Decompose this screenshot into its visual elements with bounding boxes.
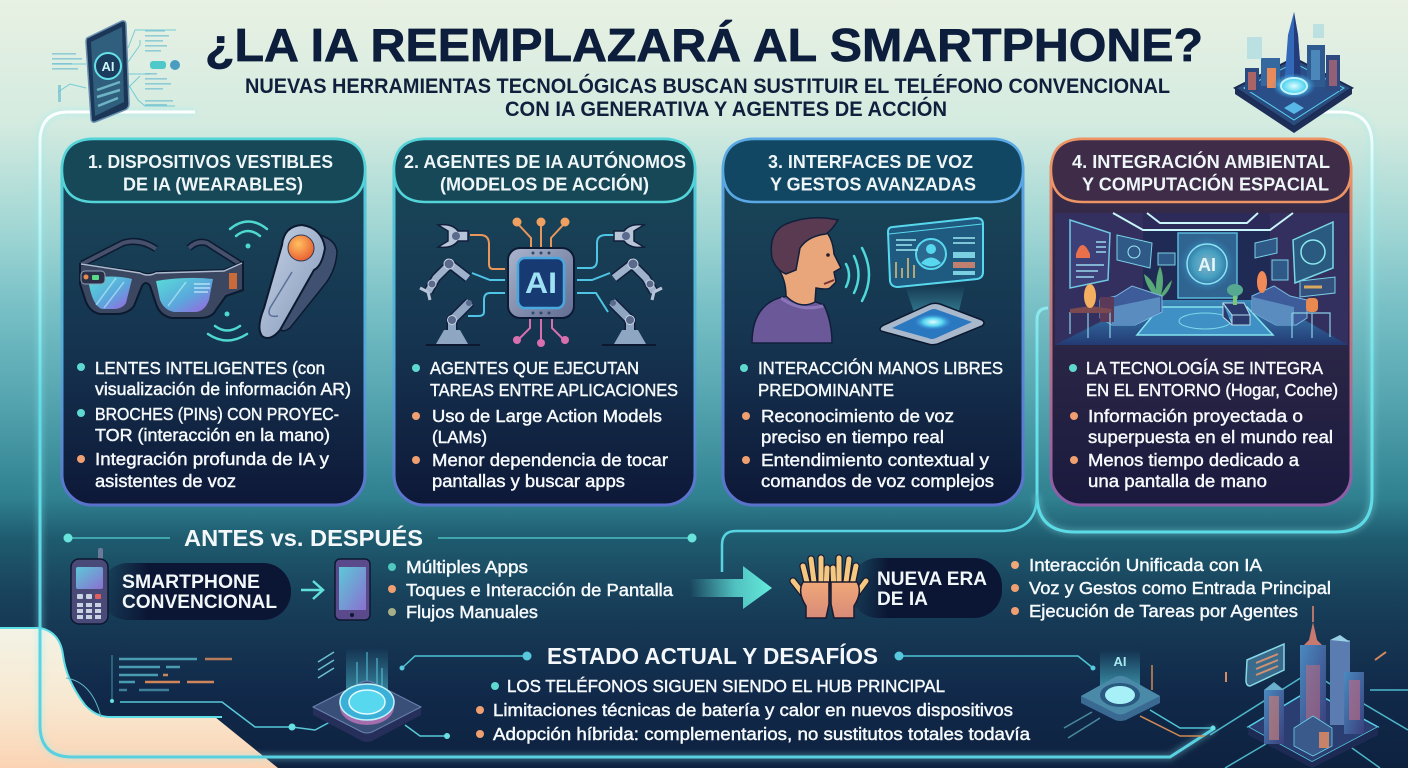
bullet list: wearables: asistentes de voz xyxy=(95,471,236,491)
bullet list: current state: Limitaciones técnicas de batería y calor en nuevos dispositivos xyxy=(493,700,1013,720)
bullet list: wearables: LENTES INTELIGENTES (con xyxy=(95,358,325,378)
bullet list: ambient integration: EN EL ENTORNO (Hogar, Coche) xyxy=(1086,380,1338,400)
bullet list: ambient integration: Información proyectada o xyxy=(1088,406,1303,426)
heading: voice and gestures: Y GESTOS AVANZADAS xyxy=(770,174,976,194)
heading: current state xyxy=(400,642,1096,670)
arrow: small xyxy=(301,581,323,599)
bullet list: before: Toques e Interacción de Pantalla xyxy=(406,580,673,600)
bullet list: agents xyxy=(412,358,678,491)
heading: voice and gestures: 3. INTERFACES DE VOZ xyxy=(768,151,973,172)
heading: wearables: 1. DISPOSITIVOS VESTIBLES xyxy=(88,151,333,172)
bullet list: wearables xyxy=(77,358,351,491)
icon: AI phone with data callouts xyxy=(52,21,180,122)
bullet list: wearables: visualización de información AR) xyxy=(95,379,351,399)
diagram: AI chip and robot arms xyxy=(420,218,662,347)
icon: feature phone xyxy=(71,548,108,624)
bullet list: ambient integration: una pantalla de mano xyxy=(1088,471,1267,491)
icon: AI phone with data callouts: AI xyxy=(102,59,114,74)
pill: conventional smartphone: CONVENCIONAL xyxy=(122,592,277,613)
illustration: smart living room xyxy=(1055,213,1348,345)
heading: current state: ESTADO ACTUAL Y DESAFÍOS xyxy=(547,642,878,669)
pill: new AI era: NUEVA ERA xyxy=(877,569,987,590)
title: ¿LA IA REEMPLAZARÁ AL SMARTPHONE? xyxy=(205,19,1203,71)
heading: agents: (MODELOS DE ACCIÓN) xyxy=(440,174,649,194)
glowing outer frame xyxy=(40,112,1372,757)
bullet list: voice and gestures: preciso en tiempo real xyxy=(761,427,944,447)
icon: signal waves xyxy=(208,222,267,340)
heading: wearables: DE IA (WEARABLES) xyxy=(123,174,303,194)
robot arms right xyxy=(602,225,662,345)
icon: AI chip small: AI xyxy=(1114,654,1126,669)
heading: voice and gestures xyxy=(723,139,1023,202)
bullet list: voice and gestures xyxy=(740,357,1003,491)
bullet list: voice and gestures: Entendimiento contextual y xyxy=(761,450,989,470)
bullet list: agents: (LAMs) xyxy=(432,427,487,447)
panel: ambient integration xyxy=(1051,139,1351,505)
bullet list: after xyxy=(1011,555,1331,621)
bullet list: voice and gestures: PREDOMINANTE xyxy=(758,380,894,400)
icon: AI chip small xyxy=(1064,650,1216,738)
bullet list: before: Múltiples Apps xyxy=(406,557,528,577)
bullet list: voice and gestures: Reconocimiento de voz xyxy=(761,406,954,426)
bullet list: ambient integration: Menos tiempo dedicado a xyxy=(1088,450,1299,470)
bullet list: after: Interacción Unificada con IA xyxy=(1029,555,1262,575)
bullet list: wearables: Integración profunda de IA y xyxy=(95,449,329,469)
bullet list: current state: LOS TELÉFONOS SIGUEN SIENDO EL HUB PRINCIPAL xyxy=(507,676,945,696)
icon: open hands xyxy=(793,558,866,618)
bullet list: voice and gestures: comandos de voz complejos xyxy=(761,471,994,491)
bullet list: ambient integration: LA TECNOLOGÍA SE INTEGRA xyxy=(1086,358,1323,378)
panel: voice and gestures xyxy=(723,139,1023,505)
heading: before vs after: ANTES vs. DESPUÉS xyxy=(184,524,423,551)
pill: new AI era: DE IA xyxy=(877,589,928,610)
illustration: smart living room: AI xyxy=(1198,255,1216,275)
heading: ambient integration: Y COMPUTACIÓN ESPACIAL xyxy=(1082,174,1329,194)
bullet list: agents: pantallas y buscar apps xyxy=(432,471,625,491)
bullet list: agents: TAREAS ENTRE APLICACIONES xyxy=(430,380,678,400)
heading: ambient integration xyxy=(1051,139,1351,202)
robot arms left xyxy=(420,225,480,345)
bullet list: ambient integration xyxy=(1069,358,1338,491)
section: before vs after xyxy=(64,524,1331,624)
diagram: AI chip and robot arms: AI xyxy=(525,267,557,300)
icon: isometric future city xyxy=(1235,12,1352,133)
pill: new AI era xyxy=(850,558,1002,618)
bullet list: before: Flujos Manuales xyxy=(406,602,538,622)
bullet list: voice and gestures: INTERACCIÓN MANOS LIBRES xyxy=(758,357,1003,378)
decoration: code lines and circuit xyxy=(110,655,330,730)
bullet list: current state xyxy=(476,676,1030,744)
section: current state and challenges xyxy=(400,642,1096,744)
pill: conventional smartphone xyxy=(100,563,291,620)
heading: agents: 2. AGENTES DE IA AUTÓNOMOS xyxy=(404,151,686,172)
bullet list: wearables: TOR (interacción en la mano) xyxy=(95,425,330,445)
bullet list: after: Ejecución de Tareas por Agentes xyxy=(1029,601,1298,621)
subtitle xyxy=(245,73,1170,121)
panel: agents xyxy=(394,139,695,505)
decorative peach corner xyxy=(0,628,278,768)
bullet list: current state: Adopción híbrida: complementarios, no sustitutos totales todavía xyxy=(493,724,1030,744)
subtitle: CON IA GENERATIVA Y AGENTES DE ACCIÓN xyxy=(505,96,947,121)
bullet list: wearables: BROCHES (PINs) CON PROYEC- xyxy=(95,404,339,424)
icon: holographic hub xyxy=(313,648,450,742)
heading: before vs after xyxy=(64,524,696,551)
pill: conventional smartphone: SMARTPHONE xyxy=(122,572,260,593)
icon: future city bottom right xyxy=(1210,606,1408,768)
icon: smartphone xyxy=(335,559,370,620)
illustration: person speaking to hologram xyxy=(752,218,984,345)
heading: agents xyxy=(394,139,695,202)
bullet list: agents: Menor dependencia de tocar xyxy=(432,450,668,470)
heading: wearables xyxy=(62,139,365,202)
bullet list: agents: Uso de Large Action Models xyxy=(432,406,662,426)
bullet list: after: Voz y Gestos como Entrada Principal xyxy=(1029,578,1331,598)
panel: wearables xyxy=(62,139,365,505)
icon: AI pin xyxy=(259,225,337,338)
bullet list: agents: AGENTES QUE EJECUTAN xyxy=(430,358,639,378)
arrow: transition xyxy=(690,566,772,609)
bullet list: ambient integration: superpuesta en el mundo real xyxy=(1088,427,1333,447)
subtitle: NUEVAS HERRAMIENTAS TECNOLÓGICAS BUSCAN SUSTITUIR EL TELÉFONO CONVENCIONAL xyxy=(245,73,1170,98)
bullet list: before xyxy=(388,557,673,622)
heading: ambient integration: 4. INTEGRACIÓN AMBIENTAL xyxy=(1072,151,1330,172)
icon: smart glasses xyxy=(80,241,243,318)
